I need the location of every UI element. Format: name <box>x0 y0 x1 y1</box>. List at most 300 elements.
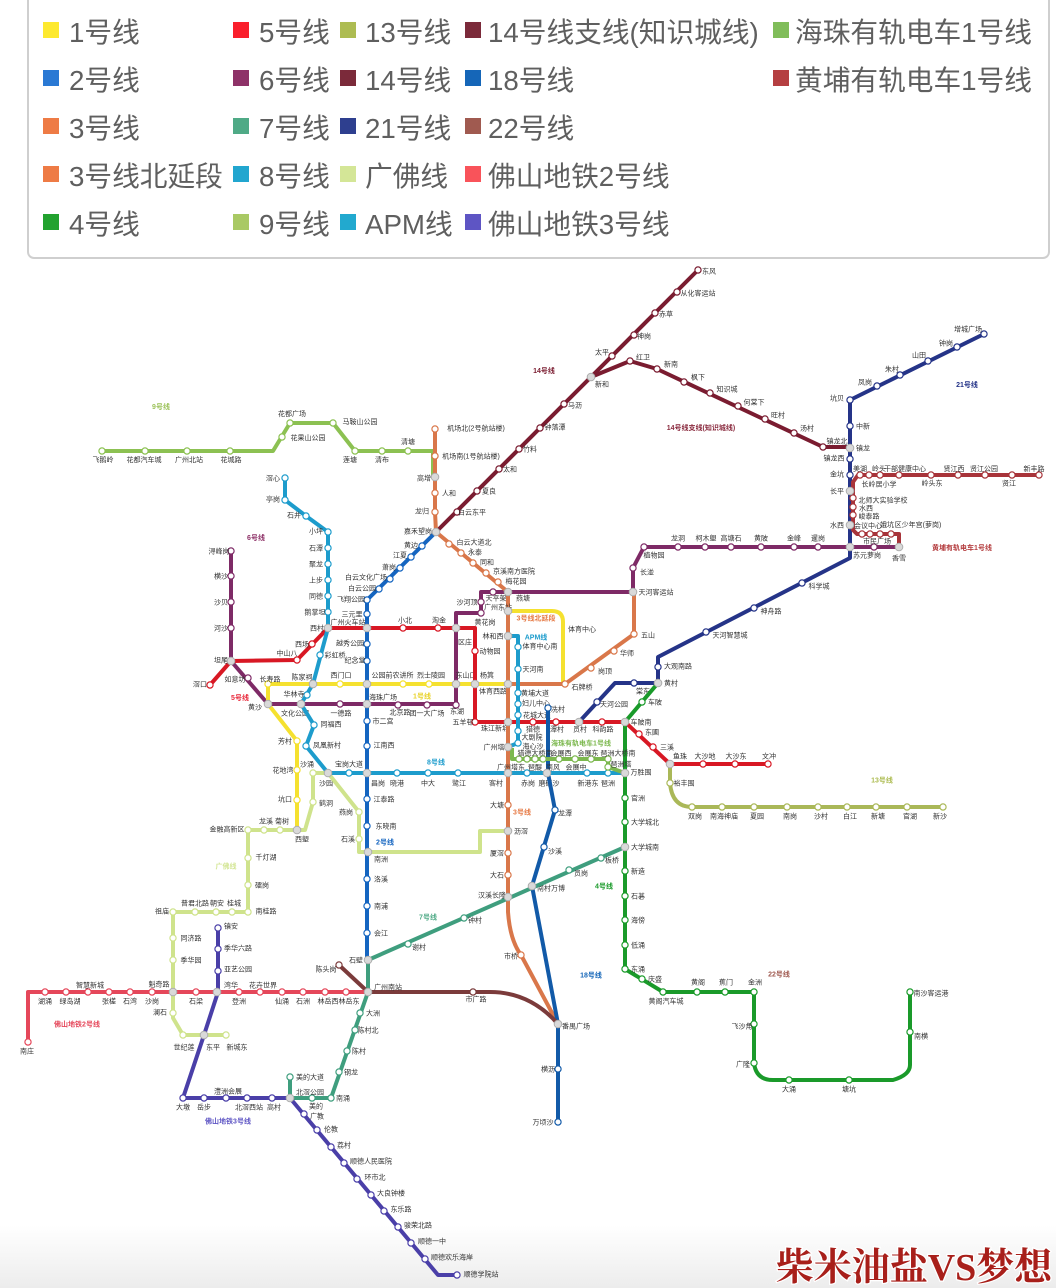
Foshan line 2: 湾华 <box>224 980 238 990</box>
line 13: 裕丰围 <box>674 778 694 788</box>
Guangfo line: 石溪 <box>341 834 355 844</box>
line 3: 高增 <box>417 474 431 482</box>
Huangpu tram line <box>850 464 1044 547</box>
Foshan line 2: 沙岗 <box>145 998 159 1006</box>
panel: legend: 13号线 <box>365 17 451 48</box>
line 2: 越秀公园 <box>336 638 364 648</box>
Foshan line 2: 绿岛湖 <box>60 996 80 1006</box>
Foshan line 3: 大墩 <box>176 1102 190 1112</box>
Huangpu tram line: 水西 <box>859 504 873 512</box>
line name labels: 22号线 <box>768 970 790 978</box>
line name labels: 3号线北延段 <box>517 614 555 622</box>
interchange stations <box>169 373 903 1102</box>
Foshan line 3: 北滘西站 <box>235 1102 263 1112</box>
line 5: 西村 <box>310 624 324 632</box>
line 4: 新造 <box>631 866 645 876</box>
Foshan line 2: 林岳西 <box>318 996 338 1006</box>
line 7: 员岗 <box>574 870 588 878</box>
line 8: 万胜围 <box>630 768 652 776</box>
line 5: 鱼珠 <box>673 752 687 760</box>
line 14 branch: 枫下 <box>691 372 705 382</box>
APM line: 黄埔大道 <box>521 688 549 698</box>
line 14: 从化客运站 <box>680 288 716 298</box>
line name labels: 1号线 <box>413 692 431 700</box>
line 1: 西门口 <box>330 670 352 680</box>
line 13: 新塘 <box>871 812 885 820</box>
line 6: 高塘石 <box>720 534 742 542</box>
line 21: 黄村 <box>664 678 678 688</box>
line name labels: 3号线 <box>513 808 531 816</box>
Huangpu tram line: 岭头东 <box>922 478 942 488</box>
line 4: 蕉门 <box>719 978 733 986</box>
line 5: 淘金 <box>432 616 446 624</box>
APM line: 大剧院 <box>522 732 542 742</box>
Foshan line 2: 石洲 <box>296 998 310 1006</box>
line 3: 番禺广场 <box>562 1022 590 1030</box>
Foshan line 2: 湖涌 <box>38 996 52 1006</box>
line name labels: 6号线 <box>247 533 265 542</box>
line 18: 万顷沙 <box>532 1118 554 1126</box>
Foshan line 3: 澧洲会展 <box>214 1086 242 1096</box>
Guangfo line: 祖庙 <box>155 906 169 916</box>
Haizhu tram line: 琶洲大桥南 <box>600 748 636 758</box>
line name labels: 9号线 <box>152 402 170 411</box>
Guangfo line: 普君北路 <box>181 898 209 908</box>
line 3: 厦滘 <box>490 848 504 858</box>
Foshan line 2: 石湾 <box>123 996 137 1006</box>
line 8: 同福西 <box>320 720 342 728</box>
line 21: 钟岗 <box>939 338 953 348</box>
line 8: 上步 <box>309 576 323 584</box>
line 6: 暹岗 <box>811 534 825 542</box>
line 4: 飞沙角 <box>732 1022 752 1030</box>
line 8: 聚龙 <box>309 560 323 568</box>
line 8: 中大 <box>421 778 435 788</box>
Guangfo line: 同济路 <box>180 934 202 942</box>
panel: legend: 8号线 <box>259 161 330 192</box>
Foshan line 3: 高村 <box>267 1102 281 1112</box>
Haizhu tram line <box>497 748 636 773</box>
Foshan line 3: 大良钟楼 <box>377 1188 405 1198</box>
line 5: 科韵路 <box>592 724 614 734</box>
line name labels: 14号线支线(知识城线) <box>667 423 735 432</box>
Guangfo line: 龙溪 <box>259 816 273 826</box>
line 3: 市桥 <box>504 952 518 960</box>
Foshan line 2: 广州南站 <box>374 982 402 992</box>
line 5: 中山八 <box>276 648 298 658</box>
panel: legend: 5号线 <box>259 17 330 48</box>
line name labels: 黄埔有轨电车1号线 <box>932 543 992 552</box>
line 5: 西场 <box>295 640 309 648</box>
line 18 <box>532 704 572 1126</box>
line 21: 天河公园 <box>600 700 628 708</box>
Huangpu tram line: 区少年宫(萝岗) <box>895 520 941 529</box>
line 18: 龙潭 <box>558 808 572 818</box>
line 5: 广州火车站 <box>330 618 366 626</box>
line 9: 飞鹅岭 <box>92 455 114 464</box>
line 1: 芳村 <box>278 736 292 746</box>
line 3: 岗顶 <box>598 668 612 676</box>
line 14: 竹料 <box>523 444 537 454</box>
line 13: 双岗 <box>688 812 702 820</box>
line 14 branch: 红卫 <box>636 352 650 362</box>
Huangpu tram line: 新丰路 <box>1024 464 1044 473</box>
line 21: 水西 <box>830 520 844 530</box>
line 14 branch: 汤村 <box>800 424 814 432</box>
line 1: 体育西路 <box>479 686 507 696</box>
line 14 branch: 知识城 <box>716 384 738 394</box>
line 18: 横沥 <box>541 1064 555 1074</box>
line 3: 机场北(2号航站楼) <box>447 424 505 432</box>
Huangpu tram line: 娥坑 <box>880 520 894 529</box>
line 4: 广隆 <box>736 1060 750 1068</box>
line 6: 横沙 <box>214 572 228 580</box>
line 5: 五羊邨 <box>452 718 474 726</box>
line 14: 钟落潭 <box>544 422 566 432</box>
line 5: 车陂南 <box>630 718 652 726</box>
panel: legend: 22号线 <box>488 113 574 144</box>
watermark: 柴米油盐VS梦想 <box>776 1247 1055 1288</box>
line 9: 花城路 <box>220 455 242 464</box>
line 21: 天河智慧城 <box>712 630 748 640</box>
Haizhu tram line: 南风 <box>546 762 560 772</box>
line 2 <box>336 532 436 964</box>
line name labels: 4号线 <box>595 882 613 890</box>
line 3: 大石 <box>490 870 504 880</box>
line 3: 白云大道北 <box>456 538 492 546</box>
line 2: 江泰路 <box>374 794 394 804</box>
line 22: 市广路 <box>466 994 486 1004</box>
line 14: 夏良 <box>482 486 496 496</box>
line 2: 南浦 <box>374 902 388 910</box>
line 6: 金峰 <box>787 534 801 542</box>
Guangfo line: 鹤洞 <box>319 798 333 808</box>
line 21: 科学城 <box>808 582 830 590</box>
line 5 <box>193 616 776 767</box>
line 21 <box>573 324 987 734</box>
line 7: 钢龙 <box>344 1068 358 1076</box>
line 21: 凤岗 <box>858 378 872 386</box>
line 5: 猎德 <box>526 724 540 734</box>
panel: legend: 黄埔有轨电车1号线 <box>795 65 1032 96</box>
line 21: 增城广场 <box>954 324 982 334</box>
line 14: 白云东平 <box>458 508 486 516</box>
line 6: 团一大广场 <box>410 708 444 718</box>
line 8: 滘心 <box>266 474 280 482</box>
line 5: 坦尾 <box>214 656 228 664</box>
Guangfo line: 魁奇路 <box>148 980 170 988</box>
line 6: 龙洞 <box>671 534 685 542</box>
line 6: 如意坊 <box>224 674 246 684</box>
Guangfo line: 燕岗 <box>339 808 353 816</box>
line 13: 官湖 <box>903 812 917 820</box>
Foshan line 2: 花卉世界 <box>249 980 277 990</box>
line 4: 石碁 <box>631 892 645 900</box>
line 4: 南横 <box>914 1032 928 1040</box>
line 21: 坑贝 <box>830 394 844 402</box>
bottom shade <box>0 1225 1056 1288</box>
line 8: 同德 <box>309 592 323 600</box>
line 1 <box>260 611 596 844</box>
Foshan line 3: 广教 <box>310 1112 324 1120</box>
line 5: 小北 <box>398 616 412 624</box>
line 2: 洛溪 <box>374 874 388 884</box>
line 13: 夏园 <box>750 812 764 820</box>
line 5: 潭村 <box>550 724 564 734</box>
line 9: 莲塘 <box>343 455 357 464</box>
line 6: 黄花岗 <box>474 618 496 626</box>
line 3: 客村 <box>489 778 503 788</box>
Haizhu tram line: 会展西 <box>550 748 572 758</box>
line 6 <box>208 534 906 718</box>
line 3: 五山 <box>641 630 655 640</box>
line 14: 马沥 <box>568 400 582 410</box>
panel: legend: 18号线 <box>488 65 574 96</box>
line 9: 广州北站 <box>175 455 203 464</box>
Guangfo line: 季华园 <box>180 956 202 964</box>
line 21: 大观南路 <box>664 662 692 670</box>
Haizhu tram line: 会展东 <box>578 748 598 758</box>
line 4: 庆盛 <box>648 974 662 984</box>
line 2: 江南西 <box>374 740 394 750</box>
line 3: 机场南(1号航站楼) <box>442 452 500 460</box>
line 21: 镇龙 <box>856 444 870 452</box>
Guangfo line: 千灯湖 <box>256 852 276 862</box>
line 2: 白云公园 <box>348 584 376 592</box>
line 5: 区庄 <box>458 638 472 646</box>
line 21: 山田 <box>912 350 926 360</box>
line name labels: 14号线 <box>533 366 555 375</box>
Foshan line 2: 张槎 <box>102 996 116 1006</box>
line 5: 大沙地 <box>694 752 716 760</box>
Foshan line 3: 镇安 <box>224 922 238 930</box>
APM line: 体育中心南 <box>522 642 558 650</box>
line 7: 陈村北 <box>358 1026 378 1034</box>
Foshan line 3: 环市北 <box>364 1172 386 1182</box>
line 7: 大洲 <box>366 1008 380 1018</box>
line 3: 同和 <box>480 558 494 566</box>
panel: legend: 3号线北延段 <box>69 161 223 192</box>
line 8: 亭岗 <box>266 494 280 504</box>
line 9: 花都汽车城 <box>126 455 162 464</box>
line 4: 官洲 <box>631 794 645 802</box>
line name labels: APM线 <box>525 632 547 642</box>
Foshan line 3: 顺德人民医院 <box>350 1156 392 1166</box>
line 4 <box>622 683 948 1094</box>
line 18: 沙溪 <box>548 846 562 856</box>
line 3: 大塘 <box>490 800 504 810</box>
Huangpu tram line: 市民广场 <box>863 536 891 546</box>
line 13: 南海神庙 <box>710 812 738 820</box>
line name labels: 21号线 <box>956 380 978 389</box>
line 9: 马鞍山公园 <box>342 417 378 426</box>
line 8: 鹅掌坦 <box>304 608 326 616</box>
line 18: 南村万博 <box>537 884 565 892</box>
line 6: 河沙 <box>214 624 228 632</box>
Foshan line 3: 顺德一中 <box>418 1236 446 1246</box>
line 6: 天平架 <box>486 594 506 602</box>
line 22: 陈头岗 <box>316 964 336 974</box>
line 1: 烈士陵园 <box>417 670 445 680</box>
line 7 <box>287 847 625 1110</box>
line 3: 广州东站 <box>484 602 512 612</box>
line 6: 文化公园 <box>281 708 309 718</box>
Guangfo line: 东平 <box>206 1042 220 1052</box>
Foshan line 2: 智慧新城 <box>76 980 104 990</box>
Foshan line 2: 石梁 <box>189 996 203 1006</box>
panel: legend: 2号线 <box>69 65 140 96</box>
line 2: 石壁 <box>349 956 363 964</box>
Huangpu tram line: 北师大实验学校 <box>858 496 908 504</box>
line name labels: 海珠有轨电车1号线 <box>551 738 611 748</box>
line 21: 中新 <box>856 422 870 430</box>
line 3: 梅花园 <box>506 576 526 586</box>
line 2: 南洲 <box>374 854 388 864</box>
line 13 <box>667 764 947 820</box>
line 21: 朱村 <box>885 364 899 374</box>
line 8: 晓港 <box>390 778 404 788</box>
line 4: 东涌 <box>631 964 645 974</box>
line 3: 华师 <box>620 648 634 658</box>
line 5: 东圃 <box>645 728 659 736</box>
panel: legend: APM线 <box>365 209 453 240</box>
line 1: 公园前 <box>372 670 392 680</box>
Huangpu tram line: 贤江 <box>1002 478 1016 488</box>
line name labels: 2号线 <box>376 838 394 846</box>
Guangfo line: 南桂路 <box>256 906 276 916</box>
line 14 branch: 新南 <box>664 360 678 368</box>
line name labels: 广佛线 <box>216 862 236 870</box>
Huangpu tram line: 峻泰路 <box>858 512 880 520</box>
Foshan line 2: 林岳东 <box>338 996 360 1006</box>
Guangfo line: 新城东 <box>226 1042 248 1052</box>
line 7: 钟村 <box>468 916 482 924</box>
line 6: 浔峰岗 <box>208 546 230 556</box>
Foshan line 3: 季华六路 <box>224 944 252 952</box>
line 14 branch: 何棠下 <box>744 398 764 406</box>
Haizhu tram line: 会展中 <box>566 762 586 772</box>
panel: legend: 9号线 <box>259 209 330 240</box>
line 13: 白江 <box>843 812 857 820</box>
APM line: 花城大道 <box>523 710 551 720</box>
line 6: 北京路 <box>390 708 410 716</box>
line 14: 太平 <box>595 348 609 356</box>
line 1: 西塱 <box>295 834 309 844</box>
panel: legend: 14号线支线(知识城线) <box>488 17 759 48</box>
line 8: 凤凰新村 <box>313 740 341 750</box>
line 1: 坑口 <box>278 794 292 804</box>
line 14: 太和 <box>503 464 517 474</box>
line 22 <box>316 962 558 1024</box>
line 8: 沙园 <box>319 780 333 788</box>
line 6: 黄陂 <box>754 534 768 542</box>
Guangfo line <box>148 760 509 1052</box>
line 13: 新沙 <box>933 812 947 820</box>
Guangfo line: 菊树 <box>275 816 289 826</box>
line 8: 华林寺 <box>284 690 304 698</box>
line 7: 板桥 <box>605 856 619 864</box>
line 4: 黄阁 <box>691 978 705 986</box>
line 6: 燕塘 <box>516 594 530 602</box>
line 3: 永泰 <box>468 548 482 556</box>
line 6: 东湖 <box>450 706 464 716</box>
line 7: 美的大道 <box>296 1072 324 1082</box>
line 5: 动物园 <box>480 646 500 656</box>
Huangpu tram line: 贤江西 <box>944 464 964 473</box>
line name labels <box>54 366 992 1126</box>
line 2: 黄边 <box>404 540 418 550</box>
line name labels: 8号线 <box>427 758 445 766</box>
line 6: 黄沙 <box>248 702 262 712</box>
Haizhu tram line: 琶洲塔 <box>610 760 632 768</box>
line 5: 珠江新城 <box>481 724 509 732</box>
Foshan line 2 <box>20 980 402 1056</box>
panel: legend: 1号线 <box>69 17 140 48</box>
line 7: 北滘公园 <box>296 1088 324 1096</box>
line 18: 冼村 <box>551 704 565 714</box>
line 4: 南沙客运港 <box>914 988 948 998</box>
line 8 <box>266 474 652 788</box>
line 7: 陈村 <box>352 1046 366 1056</box>
panel: legend: 佛山地铁3号线 <box>488 209 670 240</box>
line 8: 宝岗大道 <box>335 760 363 768</box>
Guangfo line: 世纪莲 <box>174 1042 194 1052</box>
line 4: 黄阁汽车城 <box>648 996 684 1006</box>
line 9: 清塘 <box>401 437 415 446</box>
Foshan line 3: 亚艺公园 <box>224 966 252 974</box>
line 5: 滘口 <box>193 680 207 688</box>
line 2: 江夏 <box>393 552 407 560</box>
Guangfo line: 沙涌 <box>300 760 314 768</box>
line 3: 嘉禾望岗 <box>404 526 432 536</box>
line 6: 一德路 <box>330 708 352 718</box>
line 14: 新和 <box>595 380 609 388</box>
line 9: 花果山公园 <box>290 433 326 442</box>
line 2: 市二宫 <box>372 716 394 726</box>
line 5: 杨箕 <box>480 670 494 680</box>
line 4: 海傍 <box>631 916 645 924</box>
line 14 branch <box>591 352 850 450</box>
line 2: 萧岗 <box>382 562 396 572</box>
line 1: 花地湾 <box>272 766 294 774</box>
panel: legend: 佛山地铁2号线 <box>488 161 670 192</box>
line 2: 会江 <box>374 928 388 938</box>
line name labels: 7号线 <box>419 912 437 922</box>
line name labels: 佛山地铁3号线 <box>205 1116 251 1126</box>
line 14 <box>436 266 716 532</box>
Huangpu tram line: 会议中心 <box>854 521 882 530</box>
Guangfo line: 朝安 <box>210 898 224 908</box>
line 9: 花都广场 <box>278 409 306 418</box>
line 14: 赤草 <box>659 310 673 318</box>
line 8: 磨碟沙 <box>538 778 560 788</box>
line 6: 沙河顶 <box>456 598 478 606</box>
Foshan line 2: 南庄 <box>20 1046 34 1056</box>
Foshan line 3: 顺德学院站 <box>464 1270 498 1278</box>
panel: legend <box>28 0 1049 258</box>
Haizhu tram line: 广州塔东 <box>497 762 525 772</box>
Guangfo line: 礌岗 <box>255 882 269 890</box>
line 4: 大涌 <box>782 1084 796 1094</box>
Guangfo line: 金融高新区 <box>210 824 244 834</box>
line 8: 新港东 <box>578 778 598 788</box>
line 8: 琶洲 <box>601 780 615 788</box>
Foshan line 3: 岳步 <box>197 1104 211 1112</box>
panel: legend: 广佛线 <box>365 161 448 192</box>
line 3: 石牌桥 <box>572 682 592 692</box>
line 3: 龙归 <box>415 506 429 516</box>
line 2: 昌岗 <box>371 780 385 788</box>
